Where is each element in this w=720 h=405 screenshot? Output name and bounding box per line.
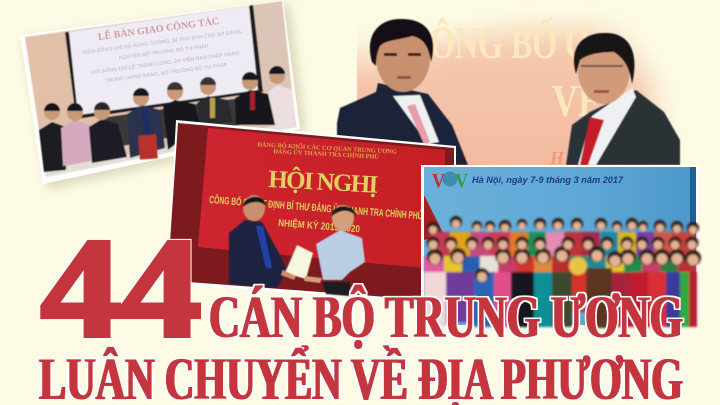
middle row bbox=[424, 256, 444, 286]
faces bbox=[428, 220, 698, 282]
banner text: ĐẢNG BỘ KHỐI CÁC CƠ QUAN TRUNG ƯƠNG bbox=[257, 140, 397, 156]
crowd bbox=[424, 216, 701, 328]
photo content bbox=[25, 1, 297, 177]
banner text: HỘI NGHỊ bbox=[268, 165, 379, 199]
hair bbox=[426, 216, 701, 282]
screen text bbox=[80, 11, 247, 87]
stage backdrop: H bbox=[549, 148, 565, 168]
banner text: ĐẢNG ỦY THANH TRA CHÍNH PHỦ bbox=[273, 147, 380, 161]
VOV logo and date bbox=[432, 170, 624, 192]
men with document bbox=[229, 195, 365, 296]
photo: two officials shaking hands bbox=[337, 16, 680, 168]
white photo frame bbox=[421, 165, 699, 327]
white photo frame bbox=[20, 0, 300, 184]
screen text: TRUNG ƯƠNG ĐẢNG, BỘ TRƯỞNG BỘ TƯ PHÁP bbox=[105, 60, 228, 84]
screen text: VỚI ĐỒNG CHÍ LÊ THÀNH LONG, ỦY VIÊN BAN CHẤP HÀNH bbox=[90, 49, 240, 76]
bottom table bbox=[44, 122, 297, 177]
people bbox=[39, 66, 295, 172]
screen text: LỄ BÀN GIAO CÔNG TÁC bbox=[97, 14, 220, 43]
red banner bbox=[198, 128, 445, 270]
bouquet bbox=[569, 257, 587, 275]
white photo frame bbox=[167, 120, 456, 304]
photo: VOV women's conference bbox=[421, 165, 701, 328]
photo shadow bbox=[22, 4, 306, 190]
banner text: CÔNG BỐ QUYẾT ĐỊNH BÍ THƯ ĐẢNG ỦY THANH TRA CHÍNH PHỦ bbox=[209, 192, 423, 222]
screen text: NGUYÊN BỘ TRƯỞNG BỘ TƯ PHÁP bbox=[118, 41, 209, 61]
blue backdrop bbox=[424, 167, 696, 325]
photo: handover ceremony bbox=[20, 0, 306, 190]
stage backdrop: ÔNG BỐ Q bbox=[430, 16, 590, 68]
curtain bbox=[168, 123, 454, 302]
VOV logo and date: Hà Nội, ngày 7-9 tháng 3 năm 2017 bbox=[472, 175, 624, 185]
man on the left bbox=[337, 19, 468, 165]
stage backdrop bbox=[357, 16, 660, 168]
front row bbox=[424, 272, 446, 327]
banner text bbox=[209, 140, 423, 235]
banner text: NHIỆM KỲ 2015-2020 bbox=[278, 216, 361, 235]
man on the right bbox=[566, 33, 680, 165]
title bbox=[39, 207, 683, 405]
back row bbox=[430, 232, 450, 272]
stage backdrop: VE bbox=[552, 75, 602, 126]
VOV logo and date: V bbox=[432, 170, 445, 192]
photo: conference hand-over bbox=[167, 120, 456, 304]
VOV logo and date: V bbox=[455, 170, 468, 192]
number 44: 44 bbox=[41, 207, 201, 369]
screen text: GIỮA ĐỒNG CHÍ HÀ HÙNG CƯỜNG, BÍ THƯ BAN CÁN SỰ ĐẢNG, bbox=[82, 27, 243, 56]
